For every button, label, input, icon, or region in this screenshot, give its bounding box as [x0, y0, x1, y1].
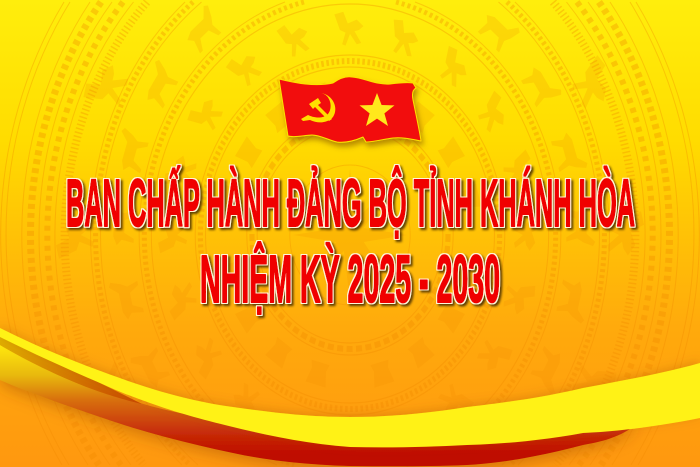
bright yellow ribbon [0, 328, 700, 447]
red-gold ribbon [0, 345, 640, 466]
icon: star [360, 93, 394, 126]
title [66, 166, 635, 317]
Communist Party flag [279, 77, 421, 142]
icon: hammer and sickle [301, 93, 335, 122]
gold wedge under yellow ribbon [0, 335, 142, 404]
